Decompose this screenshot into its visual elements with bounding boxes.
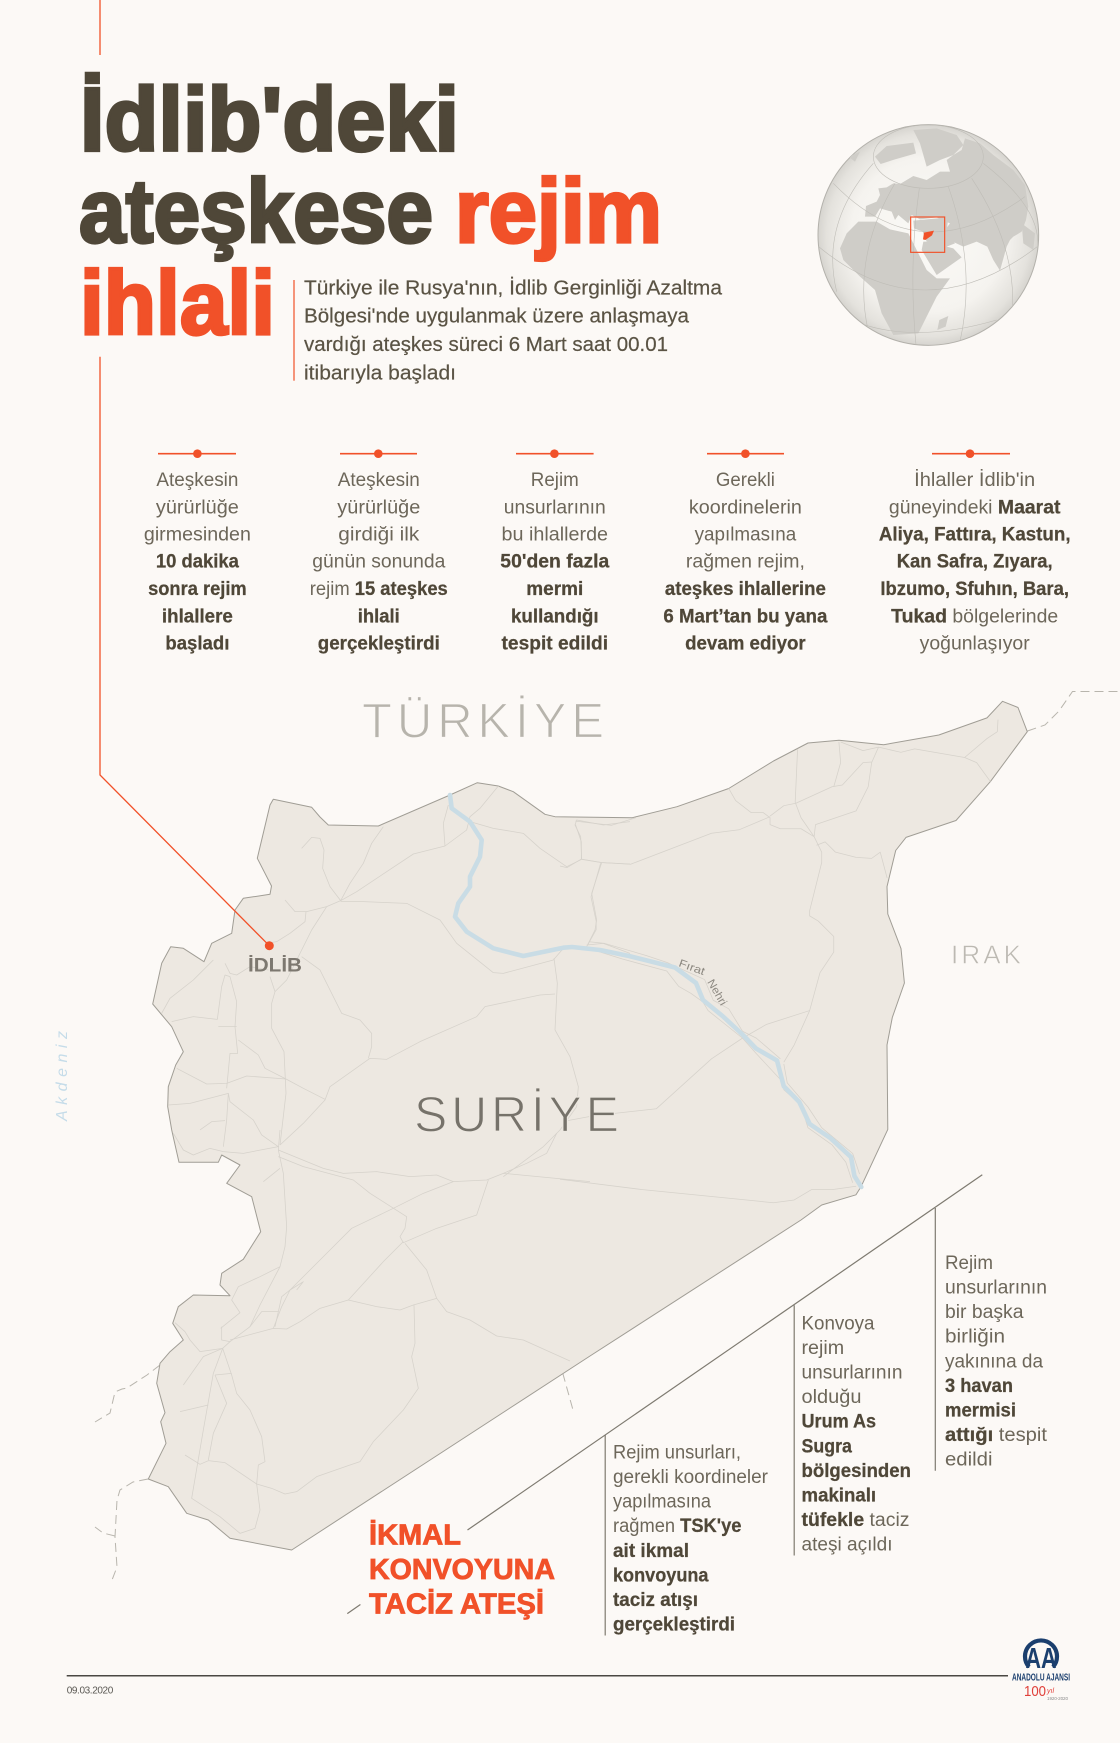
column 2: Ateşkesin [338, 470, 420, 491]
label: Türkiye: TÜRKİYE [362, 694, 604, 748]
red leader line from title to İdlib [100, 0, 269, 946]
callout text 1: taciz atışı [613, 1590, 698, 1611]
column 3 [500, 449, 610, 655]
callout text 2 [802, 1313, 911, 1556]
callout text 3 [945, 1253, 1048, 1471]
label: Akdeniz: Akdeniz [54, 1031, 71, 1122]
callout text 2: olduğu [802, 1387, 862, 1408]
column 2: rejim 15 ateşkes [310, 579, 448, 600]
river Euphrates [450, 795, 861, 1187]
continents on globe [840, 128, 1035, 335]
logo: Anadolu Ajansı: 100 [1024, 1683, 1046, 1700]
roads, west [162, 786, 630, 1177]
label: Suriye: SURİYE [414, 1087, 619, 1143]
logo: Anadolu Ajansı: AA [1026, 1643, 1057, 1675]
callout text 1: yapılmasına [613, 1492, 711, 1513]
roads, south [175, 1130, 590, 1533]
column 5: Kan Safra, Zıyara, [897, 552, 1053, 573]
callout text 1: Rejim unsurları, [613, 1442, 741, 1463]
river label: Fırat [677, 958, 706, 978]
column 1: sonra rejim [148, 579, 247, 600]
intro paragraph: vardığı ateşkes süreci 6 Mart saat 00.01 [304, 334, 668, 356]
callout text 3: bir başka [945, 1302, 1024, 1323]
column 4: Gerekli [716, 470, 775, 491]
column 2: yürürlüğe [337, 497, 420, 518]
column 3: 50'den fazla [500, 552, 610, 573]
callout heading [369, 1520, 555, 1621]
column 4 [663, 449, 828, 655]
logo: Anadolu Ajansı: ANADOLU AJANSI [1012, 1672, 1070, 1684]
column 3: bu ihlallerde [502, 525, 608, 546]
locator globe [818, 125, 1039, 345]
graticule on globe [819, 125, 1038, 345]
callout text 2: ateşi açıldı [802, 1535, 892, 1556]
callout text 2: bölgesinden [802, 1461, 911, 1482]
label: Irak: IRAK [951, 939, 1022, 969]
river label [677, 958, 729, 1008]
country shape [148, 701, 1027, 1550]
column 4: devam ediyor [685, 634, 806, 655]
column 4: koordinelerin [689, 497, 802, 518]
column 5: Aliya, Fattıra, Kastun, [879, 525, 1071, 546]
callout text 3: unsurlarının [945, 1278, 1047, 1298]
intro paragraph: itibarıyla başladı [304, 362, 456, 384]
dashed neighbouring borders [95, 692, 1120, 1580]
logo: Anadolu Ajansı: 1920-2020 [1047, 1696, 1068, 1701]
callout text 1: gerçekleştirdi [613, 1615, 735, 1636]
intro paragraph: Bölgesi'nde uygulanmak üzere anlaşmaya [304, 306, 690, 328]
roads, east [560, 720, 998, 1203]
callout text 3: Rejim [945, 1253, 993, 1274]
İdlib marker: İDLİB [248, 956, 302, 977]
column 1: 10 dakika [156, 552, 239, 573]
column 4: rağmen rejim, [686, 552, 805, 573]
logo: Anadolu Ajansı: yıl [1046, 1688, 1054, 1695]
title: İdlib'deki [80, 70, 459, 170]
column 3: tespit edildi [502, 634, 608, 655]
logo: Anadolu Ajansı [1012, 1640, 1070, 1701]
callout text 3: edildi [945, 1450, 992, 1471]
callout text 3: yakınına da [945, 1351, 1043, 1372]
river label: Nehri [704, 978, 729, 1008]
callout text 1: rağmen TSK'ye [613, 1516, 742, 1537]
title: rejim [455, 162, 662, 262]
column 5: güneyindeki Maarat [889, 497, 1061, 518]
callout text 1: ait ikmal [613, 1541, 689, 1562]
column 1: girmesinden [144, 525, 251, 546]
callout text 2: Sugra [802, 1436, 852, 1457]
callout text 3: birliğin [945, 1327, 1005, 1348]
callout text 2: tüfekle taciz [802, 1510, 910, 1531]
column 1 [144, 449, 251, 655]
column 3: Rejim [531, 470, 579, 491]
callout diagonal line [347, 1175, 982, 1636]
column 4: ateşkes ihlallerine [665, 579, 826, 600]
column 4: yapılmasına [695, 525, 797, 546]
column 5: Ibzumo, Sfuhın, Bara, [880, 579, 1069, 600]
date: 09.03.2020 [67, 1686, 114, 1696]
footer rule [67, 1675, 1008, 1677]
column 3: kullandığı [511, 606, 599, 627]
column 5 [879, 449, 1071, 655]
column 5: Tukad bölgelerinde [891, 606, 1058, 627]
callout heading: TACİZ ATEŞİ [369, 1589, 544, 1621]
callout text 2: rejim [802, 1338, 844, 1359]
column 2: günün sonunda [312, 552, 446, 573]
column 4: 6 Mart’tan bu yana [663, 606, 828, 627]
column 2: girdiği ilk [338, 525, 420, 546]
locator box and Syria [911, 217, 945, 252]
callout text 1: gerekli koordineler [613, 1467, 769, 1488]
callout text 2: makinalı [802, 1486, 876, 1506]
column 2: ihlali [358, 606, 400, 627]
title: ateşkese [79, 162, 433, 262]
column 2: gerçekleştirdi [318, 634, 440, 655]
intro paragraph: Türkiye ile Rusya'nın, İdlib Gerginliği Azaltma [304, 276, 723, 299]
column 2 [310, 449, 448, 655]
title [79, 70, 662, 354]
column 1: ihlallere [162, 606, 233, 627]
callout text 2: Urum As [802, 1412, 876, 1433]
callout heading: İKMAL [369, 1520, 461, 1552]
column 3: mermi [526, 579, 583, 600]
column 1: başladı [165, 634, 229, 655]
callout text 3: mermisi [945, 1400, 1016, 1422]
callout text 2: unsurlarının [802, 1362, 902, 1384]
column 1: yürürlüğe [156, 497, 239, 518]
callout text 3: attığı tespit [945, 1425, 1048, 1446]
column 1: Ateşkesin [156, 470, 238, 491]
column 5: yoğunlaşıyor [920, 634, 1030, 655]
map of Syria [148, 701, 1027, 1550]
column 3: unsurlarının [504, 497, 606, 518]
callout text 1: konvoyuna [613, 1565, 709, 1586]
callout text 1 [613, 1442, 769, 1636]
intro paragraph [294, 276, 723, 384]
column 5: İhlaller İdlib'in [914, 470, 1035, 491]
callout heading: KONVOYUNA [369, 1554, 555, 1586]
callout text 2: Konvoya [802, 1313, 875, 1334]
İdlib marker [248, 941, 302, 977]
callout text 3: 3 havan [945, 1376, 1013, 1397]
title: ihlali [80, 254, 275, 354]
